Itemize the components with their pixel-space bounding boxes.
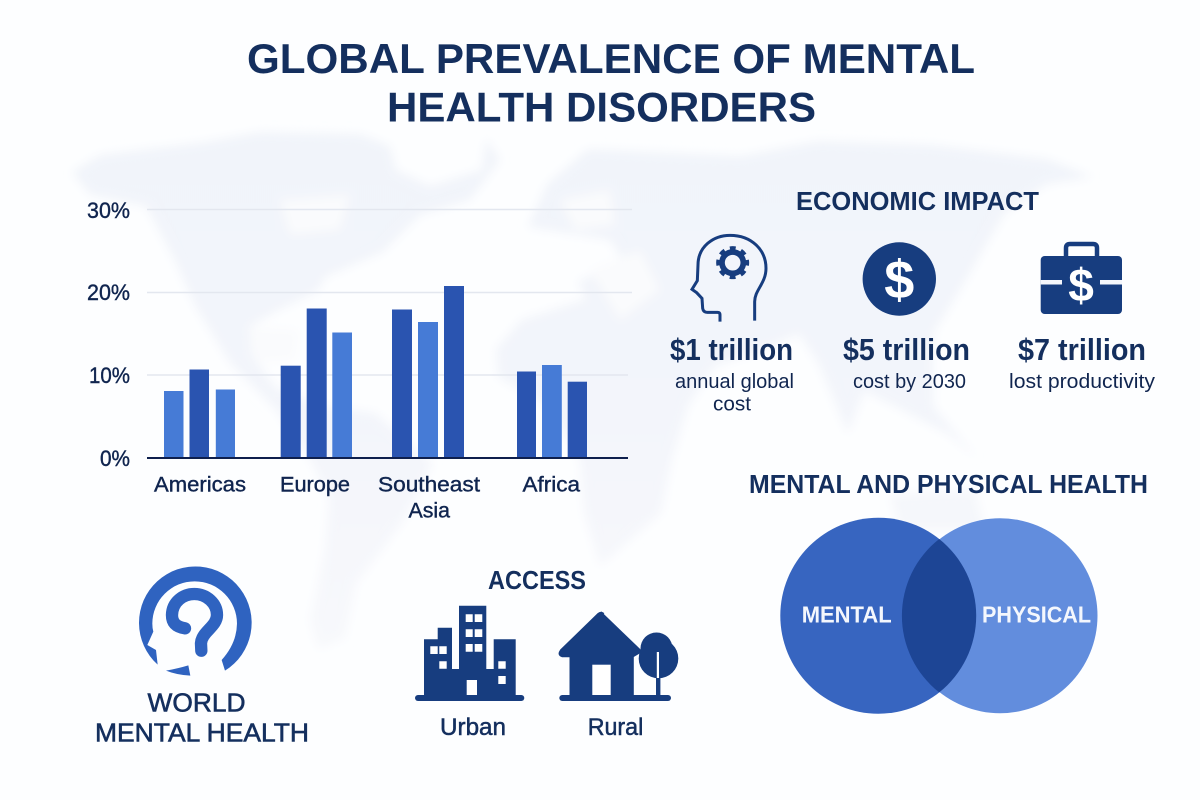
stat: $7 trillion: $7 trillion bbox=[1018, 332, 1146, 367]
stat: $7 trillion bbox=[1009, 332, 1155, 393]
title bbox=[247, 35, 975, 130]
venn circle: physical bbox=[902, 518, 1098, 713]
stat: $5 trillion bbox=[843, 332, 970, 393]
label: urban: Urban bbox=[440, 714, 506, 741]
heading: access: ACCESS bbox=[488, 565, 586, 595]
logo: world mental health bbox=[95, 566, 309, 748]
icon: briefcase bbox=[1041, 244, 1122, 314]
venn overlap bbox=[902, 539, 976, 692]
y axis labels: 10% bbox=[89, 363, 130, 388]
bars: Southeast Asia bbox=[392, 286, 464, 458]
label: physical: PHYSICAL bbox=[982, 602, 1091, 628]
title: GLOBAL PREVALENCE OF MENTAL bbox=[247, 35, 975, 82]
region labels: Asia bbox=[408, 500, 450, 522]
stat: $1 trillion: $1 trillion bbox=[670, 332, 793, 367]
icon: dollar coin bbox=[863, 242, 936, 316]
panel: mental and physical health venn bbox=[749, 469, 1148, 714]
y axis labels bbox=[87, 198, 130, 471]
bars: Americas bbox=[164, 370, 235, 458]
y axis labels: 30% bbox=[87, 198, 130, 223]
title: HEALTH DISORDERS bbox=[387, 84, 816, 130]
region labels bbox=[154, 474, 580, 522]
label: mental: MENTAL bbox=[802, 602, 892, 628]
logo text: MENTAL HEALTH bbox=[95, 718, 309, 748]
region labels: Americas bbox=[154, 474, 246, 496]
panel: economic impact bbox=[670, 186, 1155, 416]
stat: $1 trillion: annual global bbox=[675, 371, 794, 393]
stat: $7 trillion: lost productivity bbox=[1009, 371, 1155, 393]
bars: Europe bbox=[281, 308, 352, 458]
icon: head with gear bbox=[692, 235, 766, 322]
icon: rural house and tree bbox=[559, 612, 678, 701]
venn circle: mental bbox=[780, 518, 976, 714]
icon: urban buildings bbox=[415, 606, 524, 701]
logo text: WORLD bbox=[148, 688, 246, 718]
heading: mental and physical health: MENTAL AND PHYSICAL HEALTH bbox=[749, 469, 1148, 499]
y axis labels: 0% bbox=[100, 446, 130, 471]
label: rural: Rural bbox=[588, 714, 643, 741]
stat: $1 trillion bbox=[670, 332, 794, 416]
logo text bbox=[95, 688, 309, 748]
bars: Africa bbox=[517, 365, 587, 458]
x axis bbox=[147, 457, 628, 459]
region labels: Southeast bbox=[378, 474, 480, 496]
region labels: Africa bbox=[522, 474, 580, 496]
bar chart: prevalence by region bbox=[87, 198, 632, 522]
stat: $5 trillion: $5 trillion bbox=[843, 332, 970, 367]
icon: briefcase: $ bbox=[1068, 259, 1094, 311]
y axis labels: 20% bbox=[87, 280, 130, 305]
stat: $5 trillion: cost by 2030 bbox=[853, 371, 966, 393]
icon: head with question mark bbox=[139, 566, 252, 676]
stat: $1 trillion: cost bbox=[713, 394, 751, 416]
icon: dollar coin: $ bbox=[884, 250, 914, 310]
panel: access bbox=[415, 565, 678, 741]
heading: economic impact: ECONOMIC IMPACT bbox=[796, 186, 1039, 216]
world map watermark bbox=[72, 132, 1093, 649]
region labels: Europe bbox=[280, 474, 350, 496]
